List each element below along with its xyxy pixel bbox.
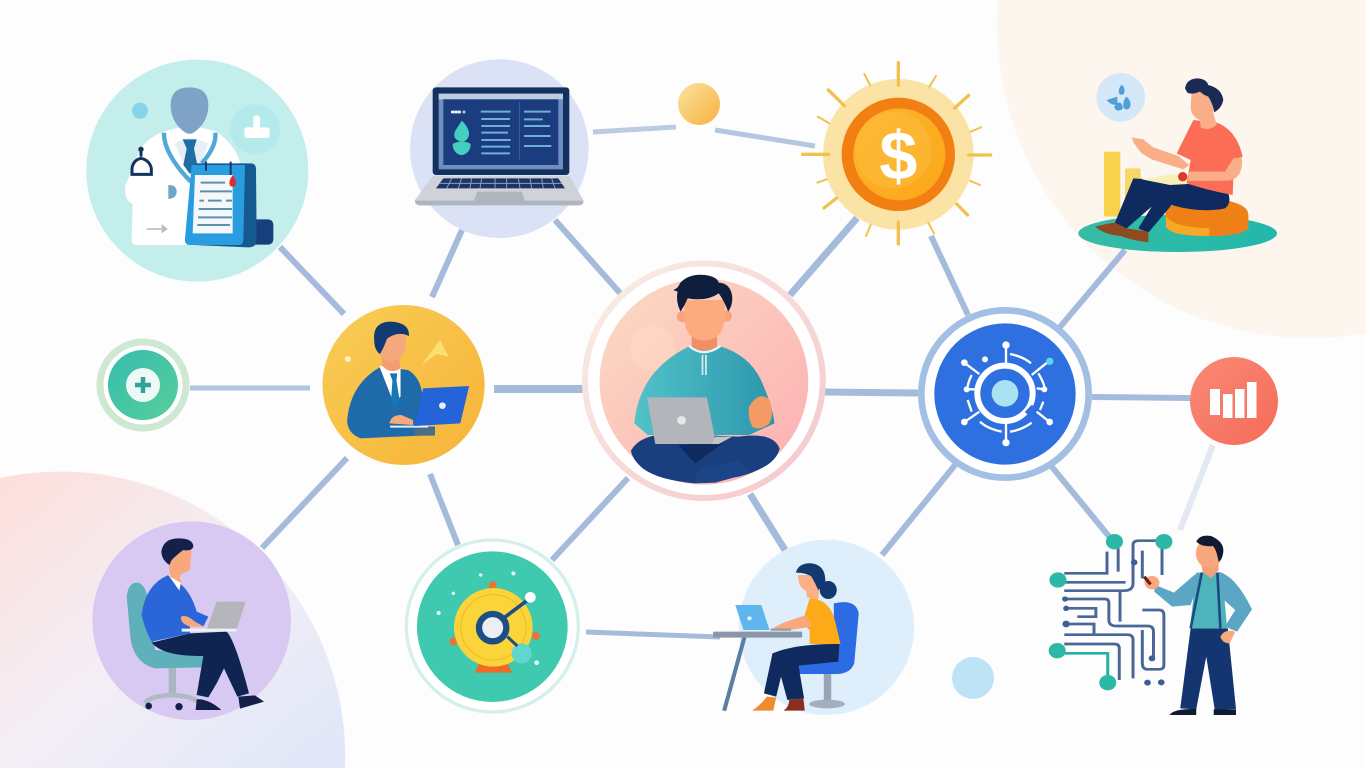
node: plus badge [100, 342, 186, 428]
decorative dot: light blue [952, 657, 994, 699]
background blob: bottom left [0, 472, 345, 768]
decorative dot: yellow [678, 83, 720, 125]
node: dollar coin sun [803, 63, 991, 244]
node: laptop dashboard [410, 59, 589, 238]
node: dollar coin sun: $ [879, 118, 917, 194]
node: person on chair with laptop [92, 521, 291, 720]
node: target dial [406, 540, 578, 712]
node: circuit board and presenter [1049, 534, 1252, 715]
node: seated analyst with bars [1078, 73, 1277, 252]
node: doctor [86, 60, 308, 282]
node: business man with blue laptop [322, 305, 485, 465]
icon: bars [1210, 382, 1256, 418]
node: central person meditating with laptop [585, 263, 823, 498]
circuit traces [1062, 541, 1164, 680]
node: woman at desk [713, 540, 914, 715]
connector lines [190, 127, 1213, 637]
node: red bar chart [1190, 357, 1278, 445]
background blob: top right [997, 0, 1366, 338]
node: network hub [921, 310, 1089, 478]
